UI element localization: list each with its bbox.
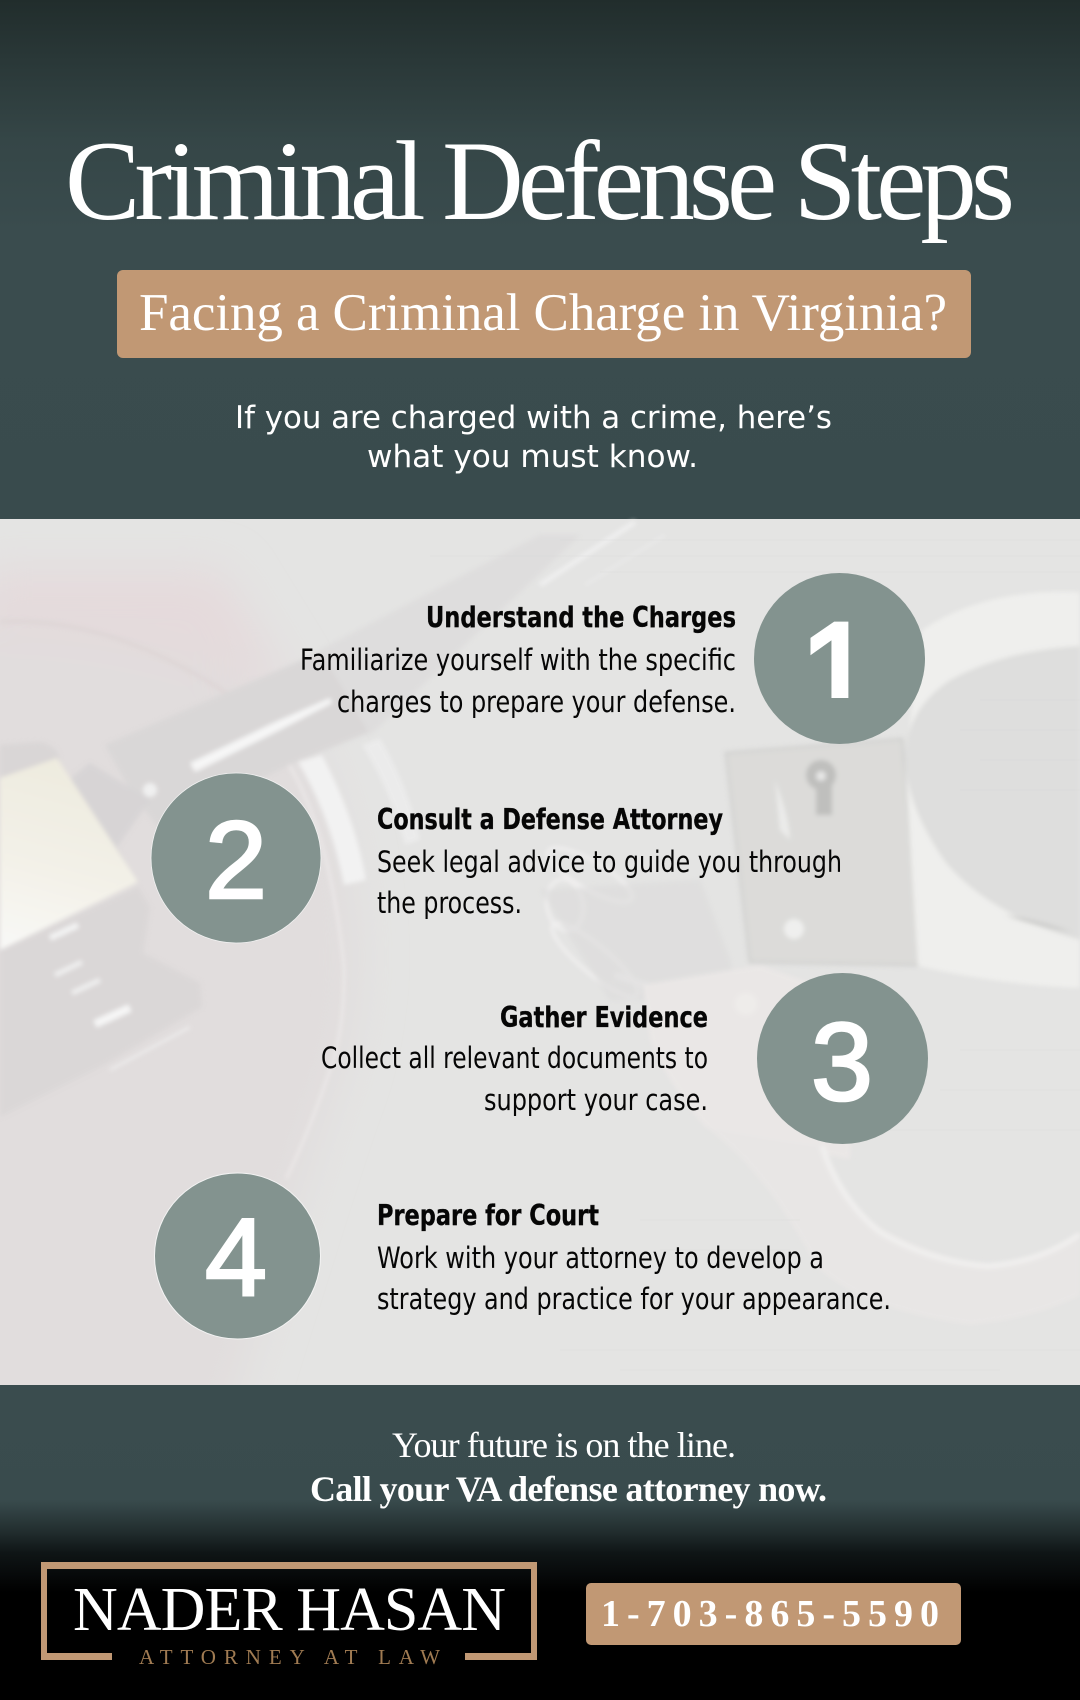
step 3 text: Collect all relevant documents to	[321, 1041, 708, 1075]
header panel	[0, 0, 1080, 519]
panel: steps with faded gavel and handcuffs photo	[0, 519, 1080, 1450]
title: Criminal Defense Steps	[65, 119, 1015, 244]
step 1 badge	[754, 573, 925, 746]
chain links	[541, 839, 660, 1006]
step 2 text: the process.	[377, 886, 522, 920]
step 4 text: strategy and practice for your appearance.	[377, 1282, 891, 1316]
step 4 badge: 4	[205, 1196, 267, 1319]
lock plate	[726, 739, 922, 1015]
subtitle banner	[117, 270, 971, 358]
step 4	[154, 1173, 891, 1339]
step 3 badge: 3	[811, 1001, 873, 1124]
step 2 text: Seek legal advice to guide you through	[377, 845, 842, 879]
step 2 text: Consult a Defense Attorney	[377, 803, 723, 836]
soft tone of the gavel side	[0, 570, 358, 1450]
gavel handle	[105, 522, 665, 830]
step 2 text	[377, 803, 842, 920]
step 4 badge	[154, 1173, 320, 1339]
upper right handcuff ring	[905, 592, 1080, 988]
call to action text: Your future is on the line.	[392, 1425, 736, 1465]
step 4 text: Work with your attorney to develop a	[377, 1241, 824, 1275]
step 1 text: Understand the Charges	[426, 601, 736, 634]
step 1 text	[300, 601, 736, 719]
step 3 badge	[757, 973, 928, 1144]
step 2 badge	[151, 773, 321, 943]
step 1 text: Familiarize yourself with the specific	[300, 643, 736, 677]
gavel head	[0, 742, 202, 1117]
step 3 text: Gather Evidence	[500, 1001, 708, 1034]
call to action text: Call your VA defense attorney now.	[310, 1469, 827, 1509]
step 1	[300, 573, 925, 746]
lower right handcuff ring	[705, 1127, 1080, 1325]
subtitle banner: Facing a Criminal Charge in Virginia?	[139, 284, 947, 342]
step 1 badge: 1	[800, 595, 875, 746]
intro text: If you are charged with a crime, here’s	[235, 400, 832, 436]
step 4 text	[377, 1199, 891, 1316]
wood grain lines	[430, 540, 1080, 1370]
gavel sound block	[0, 621, 420, 1179]
step 3 text: support your case.	[484, 1083, 708, 1117]
logo frame	[41, 1562, 537, 1660]
phone number button	[586, 1583, 961, 1645]
phone number button: 1-703-865-5590	[601, 1593, 939, 1635]
step 1 text: charges to prepare your defense.	[337, 685, 736, 719]
footer panel	[0, 1385, 1080, 1700]
intro text	[235, 400, 832, 475]
step 2 badge: 2	[205, 799, 267, 922]
background photo: gavel and handcuffs	[0, 522, 1080, 1450]
step 3	[321, 973, 928, 1144]
step 4 text: Prepare for Court	[377, 1199, 599, 1232]
logo: NADER HASAN	[73, 1576, 506, 1644]
keyhole	[806, 760, 836, 815]
step 3 text	[321, 1001, 708, 1117]
intro text: what you must know.	[367, 439, 698, 475]
step 2	[151, 773, 842, 943]
logo	[41, 1562, 537, 1669]
handcuff link plate shadow	[540, 880, 740, 1000]
logo: ATTORNEY AT LAW	[139, 1645, 440, 1669]
call to action text	[310, 1425, 827, 1509]
